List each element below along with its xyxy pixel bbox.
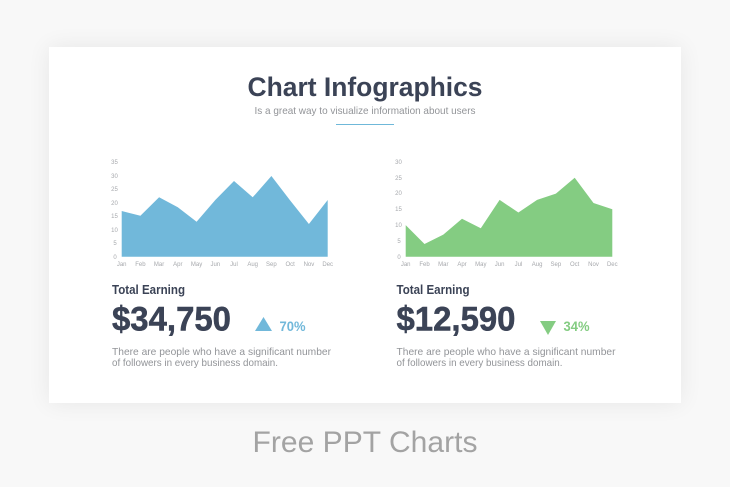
footer caption: Free PPT Charts	[252, 426, 478, 459]
right x-axis labels: Jan	[401, 262, 411, 268]
right y-axis labels: 5	[397, 239, 401, 245]
left y-axis labels: 20	[111, 201, 118, 207]
left area chart	[111, 160, 333, 268]
right y-axis labels: 10	[395, 223, 402, 229]
left stats block	[112, 283, 331, 369]
left description: of followers in every business domain.	[112, 357, 278, 369]
left y-axis labels: 15	[111, 214, 118, 220]
right x-axis labels: Jul	[515, 262, 522, 268]
left x-axis labels: Jan	[117, 262, 127, 268]
left x-axis labels: Nov	[304, 262, 314, 268]
right percentage: 34%	[564, 318, 590, 334]
right x-axis labels: Aug	[532, 262, 542, 268]
left y-axis labels	[111, 160, 118, 261]
right x-axis labels: Oct	[570, 262, 580, 268]
left x-axis labels: Jun	[210, 262, 220, 268]
right x-axis labels: Dec	[607, 262, 618, 268]
right y-axis labels: 0	[397, 255, 401, 261]
right value: $12,590	[396, 300, 516, 338]
right description: There are people who have a significant number	[396, 346, 616, 358]
left x-axis labels: Mar	[154, 262, 164, 268]
right y-axis labels: 20	[395, 191, 402, 197]
right area series	[406, 178, 612, 257]
title: Chart Infographics	[248, 72, 482, 102]
left area series	[122, 176, 328, 257]
left x-axis labels: Feb	[135, 262, 146, 268]
right x-axis labels: Jun	[495, 262, 504, 268]
right x-axis labels: Apr	[457, 262, 467, 268]
left x-axis labels: Oct	[286, 262, 295, 268]
left x-axis labels: Sep	[266, 262, 277, 268]
subtitle: Is a great way to visualize information about users	[254, 105, 476, 117]
right description: of followers in every business domain.	[396, 357, 562, 369]
left value: $34,750	[112, 300, 231, 338]
right x-axis labels: Feb	[419, 262, 430, 268]
left x-axis labels: Jul	[230, 262, 238, 268]
left y-axis labels: 5	[113, 241, 117, 247]
left y-axis labels: 0	[113, 255, 117, 261]
right y-axis labels: 25	[395, 176, 402, 182]
right area chart	[395, 160, 618, 268]
right x-axis labels	[401, 262, 618, 268]
left x-axis labels: Aug	[247, 262, 258, 268]
right y-axis labels: 30	[395, 160, 402, 166]
left y-axis labels: 30	[111, 174, 118, 180]
icon: down triangle	[540, 321, 556, 335]
right x-axis labels: May	[475, 262, 486, 268]
left y-axis labels: 10	[111, 228, 118, 234]
left y-axis labels: 35	[111, 160, 118, 166]
right label: Total Earning	[396, 283, 470, 297]
left description: There are people who have a significant number	[112, 346, 331, 358]
right x-axis labels: Mar	[438, 262, 448, 268]
left y-axis labels: 25	[111, 187, 118, 193]
left percentage: 70%	[280, 318, 306, 334]
left label: Total Earning	[112, 283, 185, 297]
left x-axis labels: May	[191, 262, 202, 268]
left x-axis labels	[117, 262, 333, 268]
icon: up triangle	[255, 317, 272, 331]
right x-axis labels: Nov	[588, 262, 599, 268]
left x-axis labels: Dec	[322, 262, 333, 268]
right stats block	[396, 283, 616, 369]
right x-axis labels: Sep	[551, 262, 562, 268]
right y-axis labels: 15	[395, 207, 402, 213]
panel: slide card	[49, 47, 681, 403]
right y-axis labels	[395, 160, 402, 261]
left x-axis labels: Apr	[173, 262, 182, 268]
title underline	[336, 124, 394, 125]
